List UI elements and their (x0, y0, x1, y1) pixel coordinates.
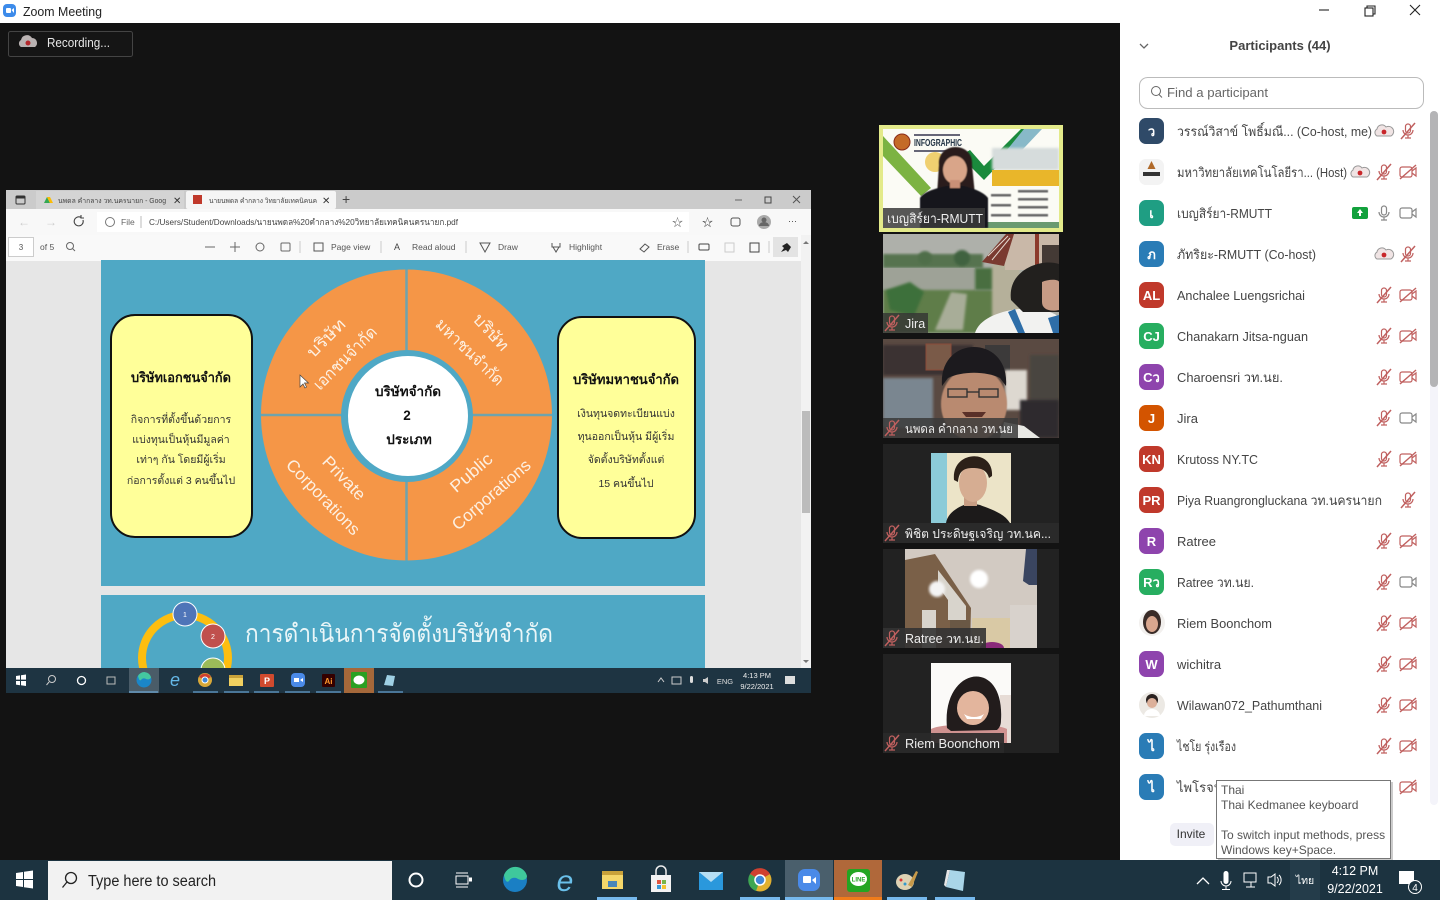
participant row 8 (1139, 405, 1416, 431)
slide: next page heading (101, 595, 705, 668)
notification centre (1399, 871, 1422, 894)
PDF toolbar: 3 (19, 243, 24, 252)
participant row 4: ภ (1147, 247, 1156, 262)
window controls (1319, 5, 1420, 16)
participant row 7 (1139, 364, 1416, 390)
participant row 10: Piya Ruangrongluckana วท.นครนายก (1177, 493, 1382, 508)
keyboard tooltip: Thai (1221, 783, 1244, 797)
participant row 10: PR (1142, 493, 1161, 508)
address bar: → (45, 215, 57, 229)
participant row 2 (1139, 159, 1416, 185)
participant row 5 (1139, 282, 1416, 308)
system tray (1197, 860, 1320, 900)
icon: notepad (935, 870, 975, 900)
participant row 15: Wilawan072_Pathumthani (1177, 698, 1322, 713)
participant row 14: W (1145, 657, 1158, 672)
search box: Type here to search (88, 873, 216, 890)
donut label: private corporations: Private (318, 452, 370, 504)
icon: mail (699, 872, 723, 890)
address bar: ☆ (672, 216, 683, 229)
browser tab strip: ✕ (322, 196, 330, 207)
donut centre label: 2 (403, 408, 411, 423)
donut label: public company Thai: บริษัท (469, 310, 512, 355)
video tile: Pichit (883, 444, 1059, 543)
participant name label: พิชิต ประดิษฐเจริญ วท.นค... (905, 527, 1051, 541)
muted icon (885, 630, 899, 646)
panel: participants (1120, 0, 1440, 860)
PDF toolbar: Erase (657, 242, 679, 252)
participant row 5: AL (1143, 288, 1160, 303)
participant row 1: ว (1148, 124, 1155, 139)
participant row 9: Krutoss NY.TC (1177, 452, 1258, 467)
scrollbar (801, 235, 811, 668)
participant name label (883, 208, 985, 228)
participant row 8: Jira (1177, 411, 1199, 426)
video tile: Noppadon (883, 339, 1059, 441)
video tile: presenter (879, 125, 1063, 232)
participant row 17: ไ (1146, 779, 1155, 795)
participant row 7: Cว (1143, 370, 1160, 385)
system tray: ไทย (1295, 874, 1314, 887)
address bar: ☆ (702, 216, 713, 229)
panel heading: Participants (44) (1229, 38, 1331, 53)
participant row 7: Charoensri วท.นย. (1177, 370, 1283, 385)
donut label: private company Thai: บริษัท (303, 315, 349, 361)
donut label: public corporations: Corporations (448, 456, 535, 534)
donut label: public corporations: Public (446, 449, 497, 496)
muted icon (885, 315, 899, 331)
card: public limited company: จัดตั้งบริษัทตั้งแต่ (588, 452, 664, 466)
mouse cursor (300, 375, 308, 388)
participant row 12: Rว (1143, 575, 1160, 590)
icon: store (651, 866, 671, 892)
address bar: ← (18, 215, 30, 229)
participant row 16 (1139, 733, 1416, 759)
process ring with steps: 2 (211, 634, 215, 641)
participant search box (1140, 78, 1424, 108)
muted icon (885, 420, 899, 436)
card: public limited company: ทุนออกเป็นหุ้น มีผู้เริ่ม (578, 429, 674, 443)
participant name label: Riem Boonchom (905, 737, 1000, 751)
card: private limited company: บริษัทเอกชนจำกัด (131, 370, 231, 385)
donut label: private company Thai: เอกชนจำกัด (310, 323, 381, 394)
slide logo and heading in background: INFOGRAPHIC (914, 138, 962, 149)
participant row 8: J (1148, 411, 1155, 426)
participant row 3: เบญสิร์ยา-RMUTT (1177, 206, 1272, 221)
icon: file explorer (597, 871, 637, 900)
Windows taskbar (0, 860, 1440, 900)
system tray: ENG (717, 677, 733, 686)
card: public limited company (558, 317, 695, 538)
PDF toolbar: A (394, 242, 400, 252)
donut diagram (261, 270, 552, 560)
participant name label: เบญสิร์ยา-RMUTT (887, 211, 983, 226)
card: public limited company: 15 คนขึ้นไป (598, 476, 654, 490)
clock (1327, 864, 1383, 896)
browser tab strip (6, 190, 811, 209)
donut centre label (375, 384, 441, 447)
muted icon (885, 735, 899, 751)
donut label: public company Thai: มหาชนจำกัด (432, 315, 507, 389)
participant row 16: ไ (1146, 738, 1155, 754)
recording indicator (8, 32, 132, 56)
icon: task view (456, 873, 472, 887)
card: private limited company (111, 315, 252, 537)
participant row 11: Ratree (1177, 534, 1216, 549)
slide: company types (101, 260, 705, 586)
taskbar icons: Ai (324, 677, 332, 686)
browser tab strip: นายนพดล คำกลาง วิทยาลัยเทคนิคนค (209, 197, 317, 205)
recording indicator: Recording... (47, 36, 110, 50)
video tile: Jira (883, 234, 1059, 333)
participant row 12: Ratree วท.นย. (1177, 575, 1254, 590)
PDF toolbar: Draw (498, 242, 519, 252)
participant row 17: ไพโรจน์ (1176, 780, 1223, 795)
icon: zoom logo (3, 4, 16, 17)
card: private limited company: แบ่งทุนเป็นหุ้นมีมูลค่า (132, 432, 230, 446)
icon: chrome (740, 868, 780, 900)
participant row 10 (1139, 487, 1415, 513)
address bar (6, 209, 811, 235)
PDF toolbar: of 5 (40, 242, 54, 252)
participant row 4 (1139, 241, 1415, 267)
card: public limited company: เงินทุนจดทะเบียนแบ่ง (577, 407, 675, 420)
card: private limited company: เท่าๆ กัน โดยมีผู้เริ่ม (136, 452, 226, 466)
chevron (1140, 44, 1148, 48)
card: private limited company: กิจการที่ตั้งขึ้นด้วยการ (131, 412, 232, 426)
icon: paint (887, 871, 927, 900)
participant row 5: Anchalee Luengsrichai (1177, 288, 1305, 303)
system tray (658, 671, 795, 691)
card: private limited company: ก่อการตั้งแต่ 3 คนขึ้นไป (127, 473, 235, 487)
donut label: private corporations: Corporations (282, 455, 364, 539)
participant row 14: wichitra (1176, 657, 1222, 672)
participant row 2: มหาวิทยาลัยเทคโนโลยีรา... (Host) (1177, 165, 1347, 180)
participant row 9 (1139, 446, 1416, 472)
donut centre label: ประเภท (386, 432, 432, 447)
participant row 6 (1139, 323, 1416, 349)
participant row 12 (1139, 569, 1416, 595)
keyboard tooltip: Thai Kedmanee keyboard (1221, 798, 1358, 812)
participant row 11: R (1147, 534, 1157, 549)
participant name label: Ratree วท.นย. (905, 632, 984, 646)
taskbar icons: P (264, 676, 270, 686)
participant search box: Find a participant (1167, 85, 1268, 100)
participant row 9: KN (1142, 452, 1161, 467)
muted icon (885, 525, 899, 541)
address bar: File (121, 217, 135, 227)
taskbar icons: e (170, 670, 180, 690)
shared screen: browser with PDF (6, 190, 811, 701)
browser tab strip: + (342, 191, 350, 207)
icon: cortana (410, 874, 422, 886)
clock: 4:12 PM (1332, 864, 1378, 878)
browser tab strip: ✕ (173, 196, 181, 207)
slide heading: การดำเนินการจัดตั้งบริษัทจำกัด (245, 615, 553, 648)
participant row 16: ไชโย รุ่งเรือง (1176, 739, 1236, 755)
search box (48, 861, 392, 900)
icon: start (16, 870, 33, 888)
window title: Zoom Meeting (23, 4, 102, 19)
PDF toolbar: Read aloud (412, 242, 456, 252)
participant row 3 (1139, 200, 1416, 226)
keyboard tooltip (1216, 780, 1393, 860)
icon: line: LINE (852, 878, 865, 884)
clock: 9/22/2021 (1327, 882, 1383, 896)
participant row 3: เ (1149, 206, 1154, 221)
participant row 1 (1139, 118, 1415, 144)
invite button: Invite (1177, 827, 1206, 841)
system tray: 4:13 PM (743, 671, 771, 680)
notification centre: 4 (1412, 883, 1418, 894)
keyboard tooltip: To switch input methods, press (1221, 828, 1385, 842)
participant row 6: Chanakarn Jitsa-nguan (1177, 329, 1308, 344)
participant row 6: CJ (1143, 329, 1160, 344)
participant row 15 (1139, 692, 1416, 718)
scrollbar (1430, 111, 1438, 805)
title bar (0, 0, 1120, 23)
participant name label: Jira (905, 317, 925, 331)
inner Windows taskbar (6, 668, 811, 693)
icon: internet explorer: e (557, 865, 573, 898)
participant row 1: วรรณ์วิสาข์ โพธิ์มณี... (Co-host, me) (1177, 122, 1372, 139)
invite button (1170, 823, 1214, 846)
process ring with steps (138, 602, 232, 668)
slide logo and heading in background (894, 134, 962, 152)
participant row 13: Riem Boonchom (1177, 616, 1272, 631)
participant row 14 (1139, 651, 1416, 677)
PDF toolbar (6, 235, 811, 261)
taskbar icons (16, 670, 403, 692)
PDF toolbar: Page view (331, 242, 371, 252)
icon: line (834, 860, 882, 900)
presenter figure (920, 147, 988, 228)
browser tab strip: นพดล คำกลาง วท.นครนายก - Goog (58, 197, 166, 205)
system tray: 9/22/2021 (740, 682, 774, 691)
process ring with steps: 1 (183, 612, 187, 619)
participant row 11 (1139, 528, 1416, 554)
participant row 17 (1139, 774, 1416, 800)
PDF toolbar: Highlight (569, 242, 603, 252)
video tile: Riem (883, 654, 1059, 753)
icon: zoom (785, 860, 833, 900)
address bar: C:/Users/Student/Downloads/นายนพดล%20คำกลาง%20วิทยาลัยเทคนิคนครนายก.pdf (149, 217, 459, 227)
card: public limited company: บริษัทมหาชนจำกัด (573, 372, 679, 387)
participant name label: นพดล คำกลาง วท.นย (905, 422, 1013, 436)
donut centre label: บริษัทจำกัด (375, 384, 441, 399)
address bar: ··· (788, 216, 797, 226)
icon: edge (503, 867, 527, 892)
keyboard tooltip: Windows key+Space. (1221, 843, 1336, 857)
video tile: Ratree (883, 549, 1059, 654)
participant row 4: ภัทริยะ-RMUTT (Co-host) (1177, 247, 1316, 262)
participant row 13 (1139, 610, 1416, 636)
